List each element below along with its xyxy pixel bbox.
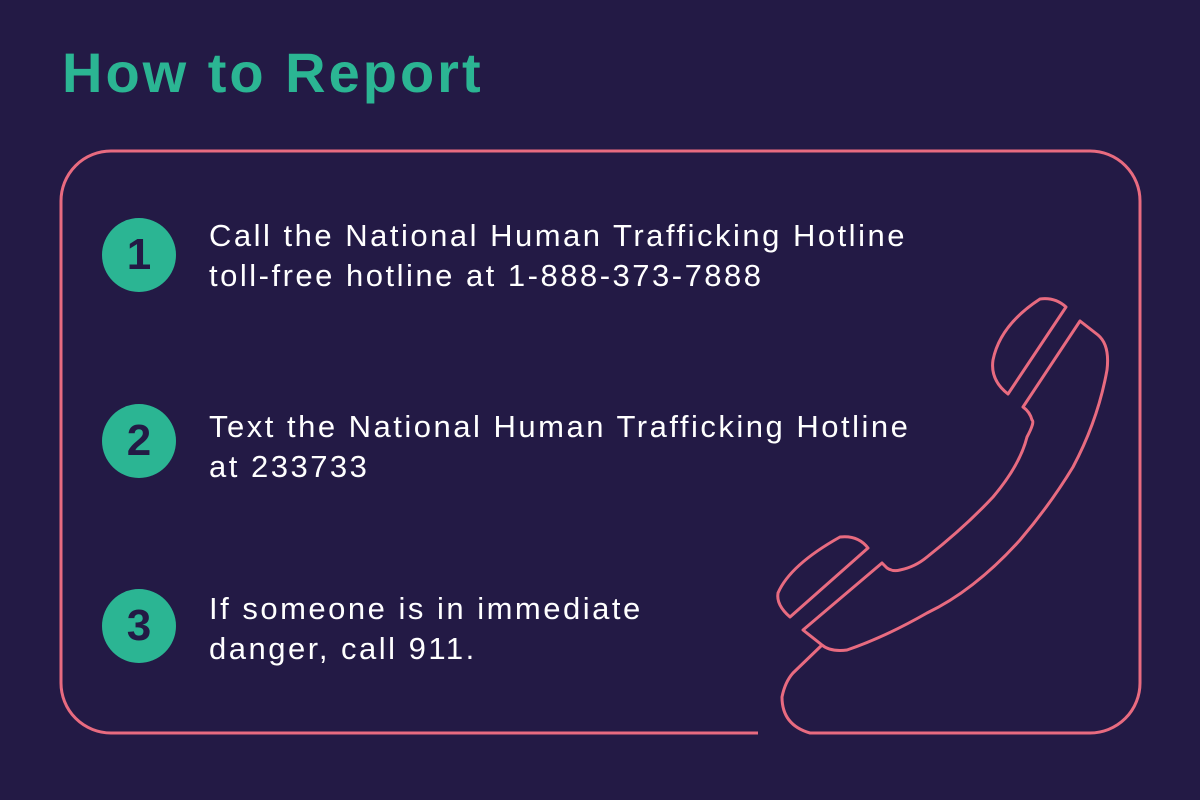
icon: number 1 (102, 218, 176, 292)
text: step 3 (209, 591, 643, 666)
text: step 1: Call the National Human Trafficking Hotline (209, 218, 907, 253)
icon: number 2 (102, 404, 176, 478)
icon: phone (778, 299, 1108, 650)
step 3 (102, 589, 643, 666)
icon: number 3 (102, 589, 176, 663)
text: step 2: Text the National Human Trafficking Hotline (209, 409, 910, 444)
text: step 1: toll-free hotline at 1-888-373-7888 (209, 258, 764, 293)
step 1 (102, 218, 907, 293)
title: How to Report (62, 41, 484, 104)
icon: number 2: 2 (127, 416, 151, 465)
icon: number 3: 3 (127, 601, 151, 650)
text: step 3: If someone is in immediate (209, 591, 643, 626)
text: step 2: at 233733 (209, 449, 369, 484)
text: step 3: danger, call 911. (209, 631, 477, 666)
step 2 (102, 404, 910, 484)
icon: number 1: 1 (127, 230, 151, 279)
text: step 1 (209, 218, 907, 293)
text: step 2 (209, 409, 910, 484)
